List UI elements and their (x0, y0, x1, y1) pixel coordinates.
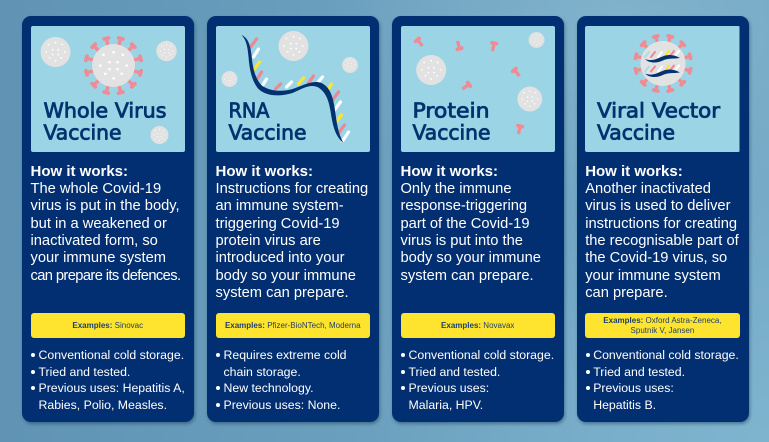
text: how it works: can prepare. (585, 285, 668, 301)
illustration: whole virus vaccine (31, 26, 185, 152)
text: how it works: introduced into your (216, 250, 345, 266)
bullet list: Conventional cold storage. (38, 348, 184, 362)
illustration: protein vaccine (401, 26, 555, 152)
text: how it works: How it works: (585, 163, 683, 180)
text: how it works: Instructions for creating (216, 181, 368, 197)
bullet list (586, 348, 739, 412)
examples callout: Sputnik V, Jansen (631, 326, 694, 334)
bullet list: Previous uses: (593, 381, 674, 395)
bullet list: Tried and tested. (593, 364, 685, 378)
bullet list: Malaria, HPV. (408, 398, 483, 412)
text: how it works: your immune system (30, 250, 166, 266)
text: how it works: The whole Covid-19 (30, 181, 161, 197)
examples callout (400, 312, 555, 338)
bullet list: chain storage. (224, 364, 301, 378)
illustration: viral vector vaccine: Viral Vector (597, 98, 721, 122)
bullet list: Previous uses: Hepatitis A, (38, 381, 185, 395)
examples callout (30, 312, 185, 338)
bullet list: Conventional cold storage. (593, 348, 739, 362)
illustration: protein vaccine: Vaccine (412, 120, 490, 144)
text: how it works: body so your immune (400, 250, 541, 266)
text: how it works: virus is put in the body, (30, 198, 180, 214)
bullet list: Rabies, Polio, Measles. (38, 398, 167, 412)
text: how it works: system can prepare. (400, 268, 534, 284)
text: how it works: virus is put into the (400, 233, 523, 249)
bullet list: Tried and tested. (408, 364, 500, 378)
text: how it works: triggering Covid-19 (216, 216, 340, 232)
examples callout: Examples: Sinovac (72, 321, 143, 330)
text: how it works: body so your immune (216, 268, 356, 284)
illustration: protein vaccine: Protein (412, 98, 489, 122)
illustration: viral vector vaccine: Vaccine (597, 120, 675, 144)
panel: RNA vaccine (207, 16, 379, 422)
text: how it works: Another inactivated (585, 181, 711, 197)
text: how it works (400, 163, 541, 284)
illustration: RNA vaccine: Vaccine (228, 120, 306, 144)
bullet list: Hepatitis B. (593, 398, 656, 412)
text: how it works: How it works: (216, 163, 313, 180)
bullet list: Requires extreme cold (224, 348, 347, 362)
examples callout: Examples: Oxford Astra-Zeneca, (603, 316, 722, 325)
examples callout (585, 312, 740, 338)
examples callout (216, 312, 370, 338)
text: how it works: the Covid-19 virus, so (585, 250, 727, 266)
bullet list: Tried and tested. (38, 364, 130, 378)
panel: protein vaccine (392, 16, 564, 422)
panel: whole virus vaccine (22, 16, 194, 422)
bullet list: Conventional cold storage. (408, 348, 554, 362)
text: how it works (30, 163, 180, 284)
illustration: RNA vaccine (216, 26, 370, 152)
text: how it works: inactivated form, so (30, 233, 158, 249)
text: how it works: virus is used to deliver (585, 198, 730, 214)
text: how it works: part of the Covid-19 (400, 216, 530, 232)
text: how it works: can prepare its defences. (30, 268, 180, 284)
text: how it works: How it works: (400, 163, 498, 180)
bullet list (216, 348, 347, 412)
illustration: whole virus vaccine: Whole Virus (43, 98, 166, 122)
bullet list: Previous uses: (408, 381, 489, 395)
text: how it works: the recognisable part of (585, 233, 739, 249)
bullet list: Previous uses: None. (224, 398, 340, 412)
text: how it works: your immune system (585, 268, 721, 284)
text: how it works (585, 163, 739, 301)
text: how it works: Only the immune (400, 181, 512, 197)
text: how it works: system can prepare. (216, 285, 349, 301)
illustration: viral vector vaccine (585, 26, 740, 152)
text: how it works (216, 163, 368, 301)
examples callout: Examples: Novavax (441, 321, 514, 330)
bullet list (401, 348, 554, 412)
text: how it works: response-triggering (400, 198, 527, 214)
illustration: whole virus vaccine: Vaccine (43, 120, 121, 144)
bullet list (31, 348, 185, 412)
text: how it works: but in a weakened or (30, 216, 167, 232)
bullet list: New technology. (224, 381, 314, 395)
examples callout: Examples: Pfizer-BioNTech, Moderna (225, 321, 361, 330)
text: how it works: instructions for creating (585, 216, 737, 232)
illustration: RNA vaccine: RNA (228, 98, 269, 122)
text: how it works: an immune system- (216, 198, 344, 214)
text: how it works: How it works: (30, 163, 128, 180)
panel: viral vector vaccine (577, 16, 749, 422)
text: how it works: protein virus are (216, 233, 321, 249)
